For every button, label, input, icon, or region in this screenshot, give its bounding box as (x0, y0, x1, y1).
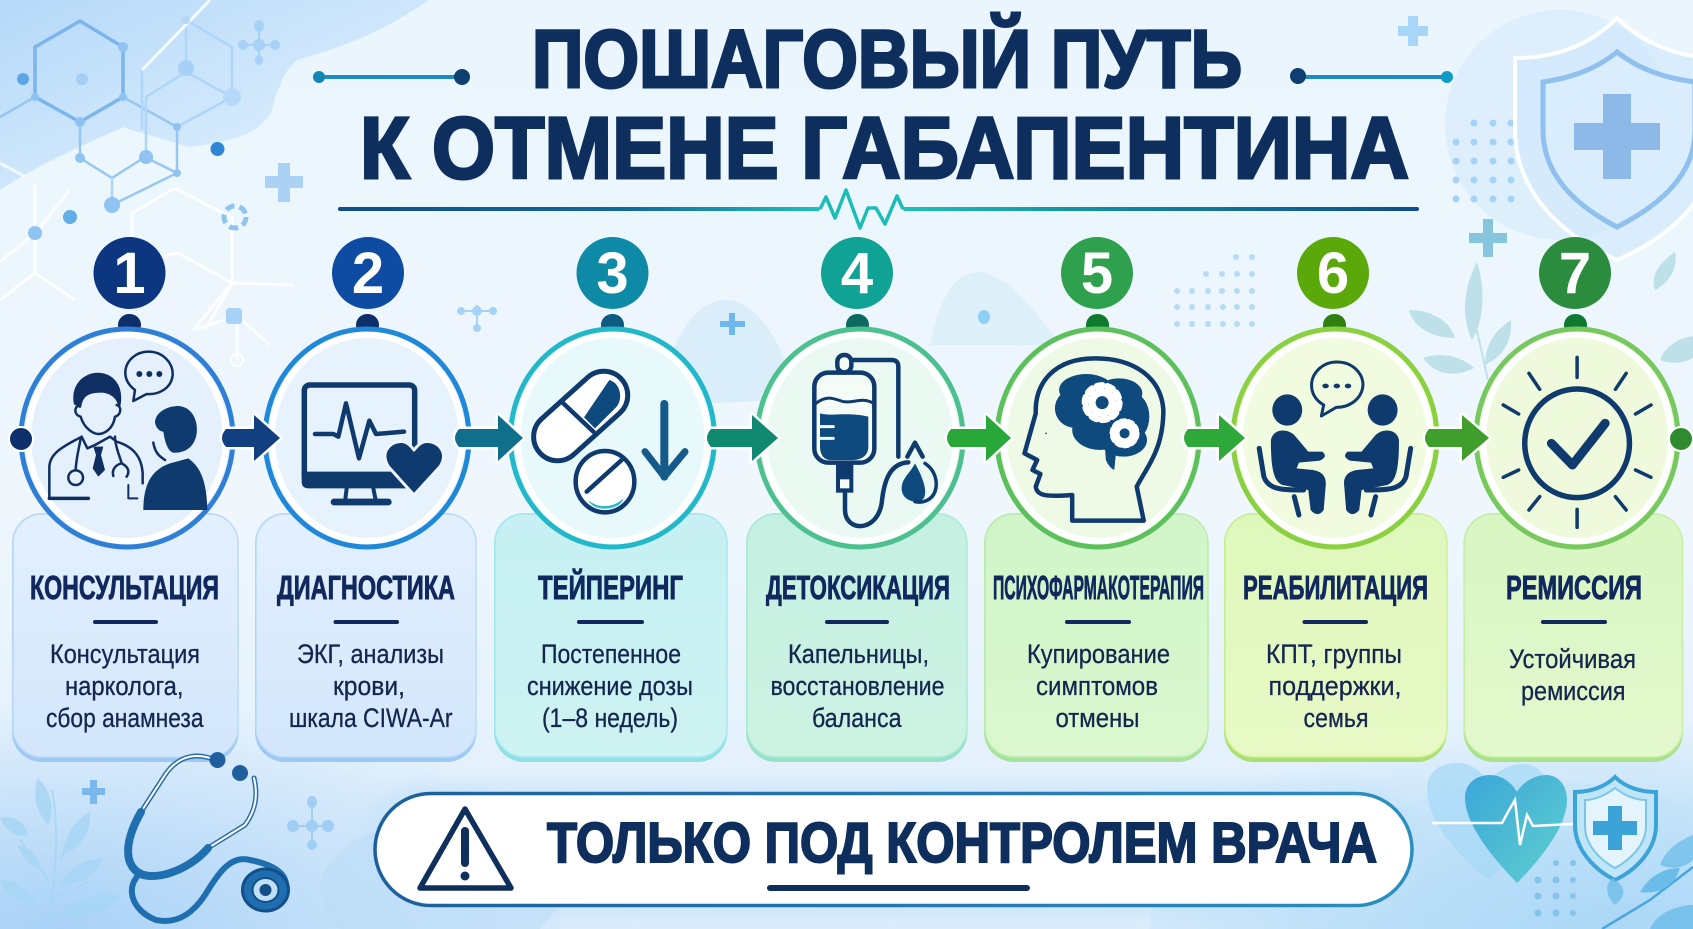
card 1: КОНСУЛЬТАЦИЯ (30, 569, 219, 606)
card 1: Консультация (50, 639, 200, 669)
molecular network top-left (0, 0, 294, 366)
step 5 badge: 5 (1081, 241, 1113, 306)
step 6 badge: 6 (1317, 241, 1349, 306)
arrow 6 to 7 (1425, 415, 1489, 461)
icon: warning triangle (420, 809, 511, 888)
icon: molecule bottom left (288, 797, 333, 849)
icon: leaves bottom left (0, 778, 122, 929)
card 4: ДЕТОКСИКАЦИЯ (766, 569, 950, 606)
step 1 badge (94, 237, 166, 336)
card 2 (255, 513, 476, 762)
title: К ОТМЕНЕ ГАБАПЕНТИНА (360, 100, 1409, 197)
icon: shield top right (1515, 18, 1693, 260)
arrow 3 to 4 (707, 415, 778, 461)
step 6 badge (1297, 237, 1369, 336)
step 7 badge: 7 (1559, 241, 1591, 306)
heartbeat underline (338, 190, 1419, 228)
card 3: ТЕЙПЕРИНГ (538, 568, 683, 606)
card 3: (1–8 недель) (542, 703, 678, 733)
callout text: ТОЛЬКО ПОД КОНТРОЛЕМ ВРАЧА (547, 811, 1377, 875)
step 2 badge (332, 237, 404, 336)
card 1 (12, 513, 238, 762)
card 7: РЕМИССИЯ (1506, 569, 1642, 606)
card 6 (1224, 513, 1447, 762)
card 4 (746, 513, 968, 762)
card 5: отмены (1056, 703, 1140, 733)
icon: small decorative molecule middle (458, 305, 496, 331)
icon: plus bottom left (82, 780, 105, 804)
card 4: Капельницы, (788, 639, 929, 669)
card 6: КПТ, группы (1266, 639, 1402, 669)
card 5 (984, 513, 1208, 762)
title (360, 13, 1409, 197)
card 3 (494, 513, 728, 762)
step 4 badge: 4 (841, 241, 873, 306)
card 4: баланса (812, 703, 902, 733)
step 3 badge: 3 (596, 241, 629, 306)
icon: plus top right (1398, 16, 1428, 46)
icon: heart and shield bottom right (1427, 763, 1656, 883)
dot grid middle (1174, 254, 1255, 327)
arrow 2 to 3 (455, 415, 523, 461)
step 4 badge (821, 237, 893, 336)
card 2: ЭКГ, анализы (297, 639, 444, 669)
card 7 (1464, 513, 1683, 762)
card 2: шкала CIWA-Ar (289, 703, 453, 733)
arrow 5 to 6 (1184, 415, 1245, 461)
callout: only under doctor's supervision (362, 782, 1422, 916)
card 6: поддержки, (1268, 671, 1402, 701)
step 5 badge (1061, 237, 1133, 336)
icon: molecule top (239, 21, 279, 64)
callout underline (767, 885, 1030, 891)
title accent right (1290, 68, 1453, 84)
card 5: симптомов (1036, 671, 1158, 701)
icon: leaves bottom right (1602, 835, 1693, 929)
arrow 1 to 2 (222, 415, 280, 461)
icon: plus teal right (1469, 219, 1507, 257)
step 1 badge: 1 (113, 241, 146, 306)
dot grid bottom right (1534, 860, 1576, 916)
icon: leaves right (1409, 252, 1693, 380)
step 4 ring with icon: IV drip (757, 329, 963, 547)
card 2: крови, (333, 671, 405, 701)
start dot left (9, 427, 33, 451)
step 5 ring with icon: head with gears (997, 329, 1199, 547)
step 3 ring with icon: pills and down arrow (510, 329, 714, 547)
card 1: сбор анамнеза (46, 703, 204, 733)
icon: stethoscope (128, 752, 288, 921)
title accent left (313, 69, 470, 85)
title: ПОШАГОВЫЙ ПУТЬ (532, 13, 1242, 105)
card 5: Купирование (1027, 639, 1170, 669)
text: ПСИХОФАРМАКОТЕРАПИЯ (993, 569, 1204, 606)
icon: plus left (265, 163, 303, 202)
end dot right (1669, 427, 1693, 451)
step 6 ring with icon: two people talking (1233, 329, 1437, 547)
step 2 badge: 2 (352, 241, 384, 306)
decorative dot middle (978, 310, 990, 324)
card 6: РЕАБИЛИТАЦИЯ (1243, 569, 1428, 606)
dot grid right (1452, 120, 1514, 202)
card 4: восстановление (770, 671, 944, 701)
card 1: нарколога, (65, 671, 184, 701)
step 7 badge (1539, 237, 1611, 336)
step 2 ring with icon: monitor and heart (265, 329, 469, 547)
card 6: семья (1304, 703, 1368, 733)
card 2: ДИАГНОСТИКА (277, 569, 455, 606)
icon: plus middle (720, 313, 745, 335)
card 3: снижение дозы (527, 671, 693, 701)
step 3 badge (576, 237, 648, 336)
card 7: ремиссия (1521, 676, 1626, 706)
card 7: Устойчивая (1509, 644, 1636, 674)
step 7 ring with icon: sun with check (1476, 329, 1678, 547)
arrow 4 to 5 (947, 415, 1011, 461)
card 3: Постепенное (541, 639, 681, 669)
step 1 ring with icon: doctor and patient (21, 329, 233, 547)
